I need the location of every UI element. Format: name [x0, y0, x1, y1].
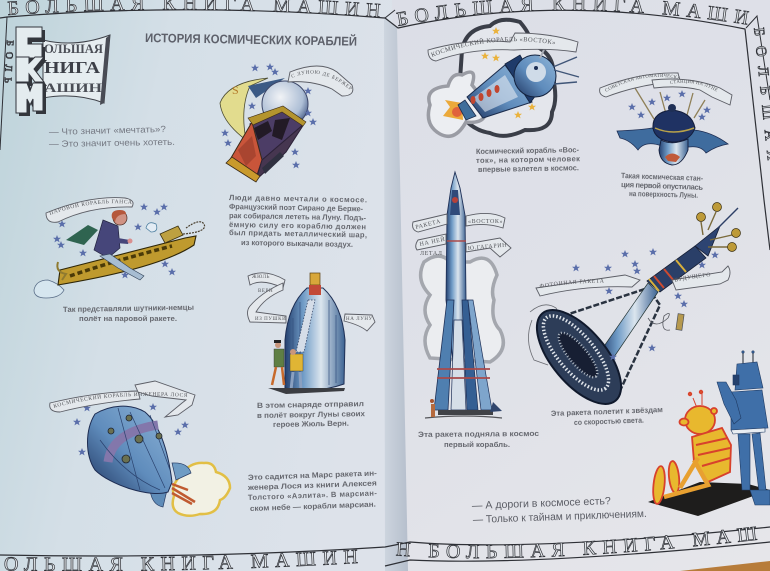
caption: steam rocket: Так представляли шутники-немцы: [63, 303, 194, 314]
ribbons: Jules Verne's shell: ВЕРН: [258, 289, 273, 294]
ribbon: Cyrano: [288, 66, 354, 96]
caption: lunar station: на поверхность Луны.: [629, 189, 698, 200]
ribbons: photon rocket: [535, 265, 730, 296]
illustration: Jules Verne's shell: [268, 273, 345, 394]
ribbons: launch rocket: НА НЕЙ: [419, 235, 446, 248]
ribbon: Vostok spacecraft: [428, 32, 578, 62]
ribbon: steam ship: ПАРОВОЙ КОРАБЛЬ ГАНСА: [50, 200, 132, 215]
caption: Los rocket: Толстого «Аэлита». В марсиан-: [248, 488, 377, 502]
illustration: photon rocket: [522, 202, 740, 418]
illustration: lunar station: [617, 88, 728, 165]
caption: Jules Verne's shell: [257, 399, 366, 429]
stars around Los rocket: [73, 403, 189, 455]
caption: Cyrano: [229, 193, 367, 249]
ribbons: launch rocket: [413, 213, 511, 257]
illustration: steam rocket with rider: [34, 210, 205, 298]
logo: Большая Книга Машин: НИГА: [44, 58, 101, 77]
illustration: Cyrano's flying box: [220, 78, 308, 182]
caption: Jules Verne's shell: героев Жюль Верн.: [273, 419, 349, 429]
logo: Большая Книга Машин: АШИН: [44, 80, 102, 95]
border band: bottom: [0, 526, 770, 571]
dialogue: dreaming: — Это значит очень хотеть.: [49, 137, 175, 149]
illustration: Cyrano's flying box: S: [232, 83, 239, 97]
ribbons: launch rocket: Ю.ГАГАРИН: [468, 243, 507, 252]
stars around lunar station: [628, 79, 711, 120]
caption: lunar station: ция первой опустилась: [621, 180, 704, 192]
caption: steam rocket: [63, 303, 194, 323]
caption: steam rocket: полёт на паровой ракете.: [79, 314, 177, 323]
caption: Vostok: [476, 145, 580, 174]
caption: launch rocket: первый корабль.: [444, 440, 510, 449]
logo: Большая Книга Машин: [16, 27, 110, 116]
caption: photon rocket: Эта ракета полетит к звёздам: [551, 405, 663, 418]
caption: launch rocket: Эта ракета подняла в космос: [418, 429, 539, 439]
ribbon: engineer Los: КОСМИЧЕСКИЙ КОРАБЛЬ ИНЖЕНЕРА ЛОСЯ: [53, 392, 188, 408]
stars around the steam rocket: [53, 203, 176, 278]
dialogue: dreaming: [49, 124, 175, 149]
illustration: Vostok spacecraft: [428, 20, 579, 136]
border band: top left: БОЛЬ: [4, 40, 14, 83]
caption: Cyrano: Люди давно мечтали о космосе.: [229, 193, 367, 204]
border band: top left: [0, 0, 385, 150]
caption: Cyrano: ёмную силу его кораблю должен: [229, 220, 367, 231]
caption: Vostok: впервые взлетел в космос.: [478, 163, 579, 174]
ribbons: launch rocket: «ВОСТОК»: [468, 219, 503, 225]
caption: Cyrano: из которого выкачали воздух.: [241, 238, 353, 249]
border band: top right: [384, 0, 770, 250]
caption: Vostok: Космический корабль «Вос-: [476, 145, 579, 156]
caption: Los rocket: женера Лося из книги Алексея: [247, 479, 377, 492]
ribbon: Vostok spacecraft: КОСМИЧЕСКИЙ КОРАБЛЬ «ВОСТОК»: [430, 36, 555, 57]
ribbons: launch rocket: РАКЕТА: [415, 219, 442, 231]
ribbons: photon rocket: БУДУЩЕГО: [674, 272, 710, 282]
caption: Jules Verne's shell: В этом снаряде отправил: [257, 399, 364, 410]
caption: Los rocket: [247, 468, 377, 513]
illustration: robots: [648, 351, 770, 516]
caption: photon rocket: со скоростью света.: [574, 416, 644, 427]
caption: Los rocket: ском небе — корабли марсиан.: [250, 500, 376, 513]
title: ИСТОРИЯ КОСМИЧЕСКИХ КОРАБЛЕЙ: [145, 30, 357, 49]
caption: Cyrano: Французский поэт Сирано де Берже-: [229, 202, 364, 213]
ribbons: Jules Verne's shell: НА ЛУНУ: [346, 317, 373, 322]
ribbons: lunar station: [599, 72, 732, 106]
ribbons: launch rocket: ЛЕТАЛ: [420, 251, 443, 257]
ribbons: Jules Verne's shell: ИЗ ПУШКИ: [255, 317, 286, 322]
ribbons: Jules Verne's shell: [248, 273, 375, 331]
dialogue: dreaming: — Что значит «мечтать»?: [49, 124, 166, 137]
ribbons: Jules Verne's shell: ЖЮЛЬ: [252, 275, 270, 280]
illustration: engineer Los rocket: [88, 406, 230, 516]
ribbons: photon rocket: ФОТОННАЯ РАКЕТА: [540, 278, 604, 288]
caption: photon rocket: [551, 405, 663, 427]
yellow robot: [652, 391, 731, 504]
caption: launch rocket: [418, 429, 539, 449]
illustration: Vostok launch rocket: [421, 172, 503, 418]
stars around the photon rocket: [572, 248, 719, 360]
ribbon: engineer Los: [49, 380, 196, 418]
caption: Los rocket: Это садится на Марс ракета ин-: [248, 468, 377, 482]
caption: Cyrano: был придать металлический шар,: [229, 228, 367, 239]
caption: Cyrano: рак собирался лететь на Луну. Подъ-: [229, 211, 367, 222]
closing dialogue: — Только к тайнам и приключениям.: [473, 508, 647, 526]
yellow stars in the cloud: [481, 27, 536, 118]
ribbons: lunar station: СТАНЦИЯ НА ЛУНЕ: [670, 80, 718, 92]
closing dialogue: [472, 495, 647, 526]
logo: Большая Книга Машин: ОЛЬШАЯ: [44, 42, 103, 56]
caption: Jules Verne's shell: в полёт вокруг Луны своих: [257, 409, 366, 420]
shadow on the floor: [648, 482, 770, 516]
caption: lunar station: [621, 171, 704, 200]
border band: bottom: Н БОЛЬШАЯ КНИГА МАШ: [396, 526, 758, 559]
ribbon: steam ship: [46, 197, 134, 223]
caption: Vostok: ток», на котором человек: [476, 154, 580, 165]
blue robot: [717, 351, 770, 505]
closing dialogue: — А дороги в космосе есть?: [472, 495, 611, 512]
stars around the flying box: [221, 63, 317, 168]
caption: lunar station: Такая космическая стан-: [621, 171, 704, 183]
